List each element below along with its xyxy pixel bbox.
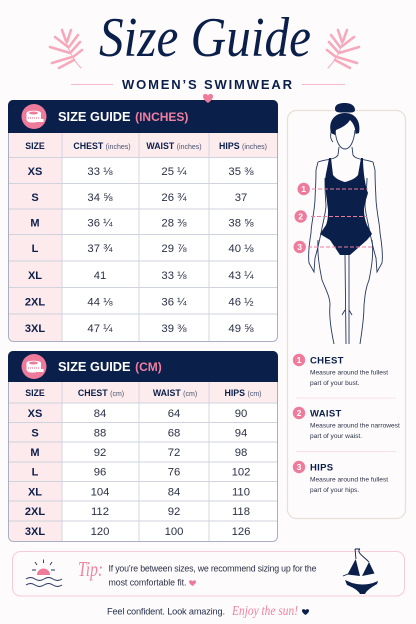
table rows: 64 xyxy=(168,408,180,420)
tip label: Tip: xyxy=(78,557,103,581)
figure illustration xyxy=(309,103,382,344)
table rows: 102 xyxy=(232,466,250,478)
hips instruction: HIPS xyxy=(310,462,333,474)
table rows: S xyxy=(31,192,39,204)
table rows: 92 xyxy=(168,506,180,518)
waist instruction: Measure around the narrowest xyxy=(310,422,400,430)
table rows: 33 ⅛ xyxy=(87,166,113,178)
table rows: 38 ⅝ xyxy=(228,218,254,230)
table rows: 72 xyxy=(168,447,180,459)
table heading: inches: SIZE GUIDE (INCHES) xyxy=(58,109,188,124)
table rows: 2XL xyxy=(25,506,45,518)
waist instruction xyxy=(293,407,400,440)
table rows xyxy=(25,166,254,335)
table rows: 26 ¾ xyxy=(161,192,187,204)
chest instruction: CHEST xyxy=(310,356,344,366)
icon: bikini xyxy=(343,549,378,594)
measure line 2: 2 xyxy=(298,212,303,222)
table rows: M xyxy=(30,447,40,459)
table rows: 41 xyxy=(94,270,106,282)
table rows: 100 xyxy=(165,526,183,538)
table rows: 68 xyxy=(168,428,180,440)
panel: size table in inches xyxy=(8,100,278,342)
table rows: 3XL xyxy=(25,526,45,538)
panel: size table in centimetres xyxy=(8,351,278,542)
table rows: 120 xyxy=(91,526,109,538)
table rows: 36 ¼ xyxy=(87,218,113,230)
table rows: XL xyxy=(28,270,42,282)
measure line 1: 1 xyxy=(301,184,306,194)
table rows: 47 ¼ xyxy=(87,323,113,335)
table rows: L xyxy=(32,466,39,478)
table rows: S xyxy=(31,428,39,440)
table rows: 49 ⅝ xyxy=(228,323,254,335)
table rows: M xyxy=(30,218,40,230)
table rows: 110 xyxy=(232,486,250,498)
table rows: 92 xyxy=(94,447,106,459)
table heading: cm: SIZE GUIDE (CM) xyxy=(58,359,162,374)
table rows: 44 ⅛ xyxy=(87,296,113,308)
hips instruction: part of your hips. xyxy=(310,487,359,494)
table rows: 98 xyxy=(235,447,247,459)
chest instruction: part of your bust. xyxy=(310,380,360,387)
table rows: 43 ¼ xyxy=(228,270,254,282)
table rows: 126 xyxy=(232,526,250,538)
waist instruction: 2 xyxy=(297,408,302,418)
table rows: 104 xyxy=(91,486,109,498)
table rows: 25 ¼ xyxy=(161,166,187,178)
measure line 3: 3 xyxy=(297,242,302,252)
column headers xyxy=(25,388,261,398)
waist instruction: WAIST xyxy=(310,408,342,420)
table heading: inches xyxy=(8,100,278,133)
table rows: 39 ⅜ xyxy=(161,323,187,335)
table rows: XL xyxy=(28,486,42,498)
table rows: XS xyxy=(28,166,42,178)
waist instruction: part of your waist. xyxy=(310,433,362,440)
tip text: If you’re between sizes, we recommend sizing up for the xyxy=(108,564,317,574)
measure line 1 xyxy=(298,183,368,195)
hips instruction: Measure around the fullest xyxy=(310,476,388,484)
table rows: 118 xyxy=(232,506,250,518)
icon: sun and waves xyxy=(26,560,62,586)
column headers: WAIST (inches) xyxy=(146,141,202,151)
column headers: CHEST (inches) xyxy=(73,141,131,151)
column headers: SIZE xyxy=(25,141,45,151)
icon: palm leaf left xyxy=(50,30,82,68)
table rows xyxy=(25,408,250,538)
column headers: HIPS (cm) xyxy=(225,388,261,398)
column headers: HIPS (inches) xyxy=(219,141,267,151)
panel: how to measure xyxy=(288,103,406,518)
table rows: XS xyxy=(28,408,42,420)
icon: heart xyxy=(203,94,213,103)
footer: Enjoy the sun! xyxy=(231,604,298,619)
table rows: 94 xyxy=(235,428,247,440)
table rows: 2XL xyxy=(25,296,45,308)
table rows: 96 xyxy=(94,466,106,478)
chest instruction: 1 xyxy=(297,355,302,365)
column headers: CHEST (cm) xyxy=(78,388,124,398)
column headers: WAIST (cm) xyxy=(153,388,197,398)
hips instruction: 3 xyxy=(297,462,302,472)
chest instruction xyxy=(293,354,388,387)
table rows: 90 xyxy=(235,408,247,420)
measure line 3 xyxy=(294,241,374,253)
table rows: 36 ¼ xyxy=(161,296,187,308)
column headers xyxy=(25,141,267,151)
tip text xyxy=(108,564,317,588)
hips instruction xyxy=(293,461,388,494)
table rows: 33 ⅛ xyxy=(161,270,187,282)
footer: Feel confident. Look amazing. xyxy=(107,606,225,616)
table rows: 3XL xyxy=(25,323,45,335)
table rows: 76 xyxy=(168,466,180,478)
column headers: SIZE xyxy=(25,388,45,398)
swimsuit xyxy=(320,158,372,255)
table rows: 29 ⅞ xyxy=(161,243,187,255)
table rows: 40 ⅛ xyxy=(228,243,254,255)
table rows: 88 xyxy=(94,428,106,440)
icon: palm leaf right xyxy=(327,30,359,68)
title: Size Guide xyxy=(99,7,311,69)
table rows: 46 ½ xyxy=(228,296,254,308)
table rows: 37 ¾ xyxy=(87,243,113,255)
tip text: most comfortable fit. xyxy=(108,578,186,588)
table rows: 37 xyxy=(235,192,247,204)
measure line 2 xyxy=(294,210,367,223)
table rows: 28 ⅜ xyxy=(161,218,187,230)
chest instruction: Measure around the fullest xyxy=(310,370,388,376)
table rows: 84 xyxy=(94,408,106,420)
hair xyxy=(330,103,359,135)
table rows: 35 ⅜ xyxy=(228,166,254,178)
subtitle: WOMEN’S SWIMWEAR xyxy=(122,77,293,92)
footer xyxy=(107,604,309,619)
table rows: L xyxy=(32,243,39,255)
table rows: 84 xyxy=(168,486,180,498)
table rows: 112 xyxy=(91,506,109,518)
table heading: cm xyxy=(8,351,278,382)
panel: tip xyxy=(12,549,404,596)
table rows: 34 ⅝ xyxy=(87,192,113,204)
